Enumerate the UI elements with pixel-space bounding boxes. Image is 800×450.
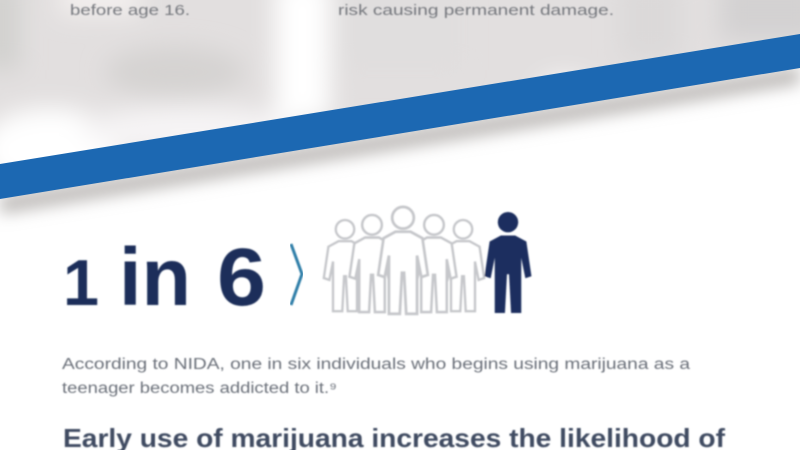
body text: According to NIDA, one in six individuals who begins using marijuana as a bbox=[62, 356, 690, 373]
text: risk causing permanent damage: risk causing permanent damage. bbox=[338, 3, 614, 19]
statistic: 1 in 6: in bbox=[119, 232, 191, 323]
icon: outer left person bbox=[324, 220, 366, 311]
shadow under diagonal band bbox=[0, 66, 800, 214]
statistic: 1 in 6 bbox=[63, 232, 266, 323]
text: before age 16: before age 16. bbox=[70, 3, 190, 19]
statistic: 1 in 6: 1 bbox=[63, 246, 99, 319]
body text bbox=[62, 356, 690, 397]
statistic: 1 in 6: 6 bbox=[217, 232, 266, 323]
icon: highlighted person bbox=[485, 212, 531, 313]
icon: group of five people, one highlighted bbox=[324, 207, 531, 314]
icon: inner right person bbox=[411, 215, 457, 312]
icon: outer right person bbox=[442, 220, 484, 311]
icon: inner left person bbox=[349, 215, 395, 312]
photo background panel bbox=[0, 0, 800, 146]
body text: teenager becomes addicted to it.⁹ bbox=[62, 380, 337, 397]
diagonal blue band bbox=[0, 34, 800, 199]
chevron arrow bbox=[291, 244, 302, 305]
icon: centre person bbox=[378, 207, 428, 314]
